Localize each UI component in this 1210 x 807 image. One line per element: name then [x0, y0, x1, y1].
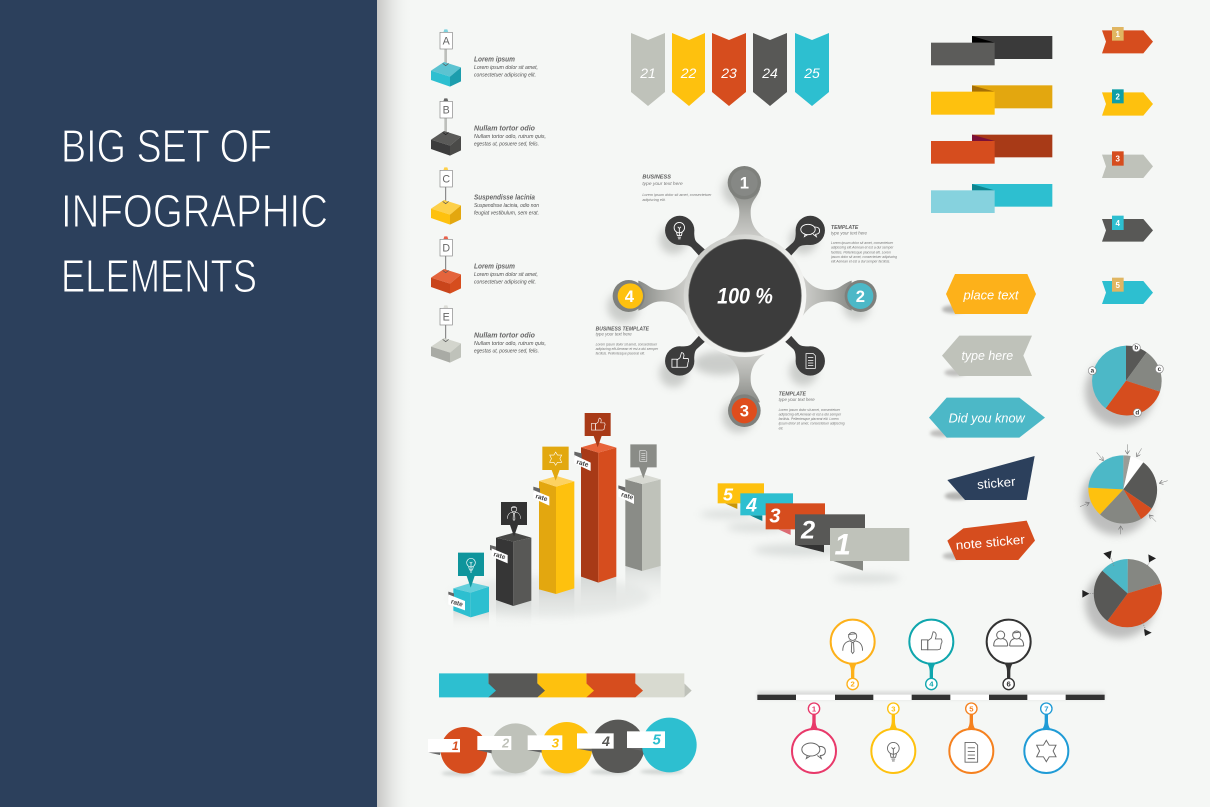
strip segment: gray — [635, 673, 692, 697]
step D: consectetuer adipiscing elit. — [474, 279, 536, 285]
icon: bulb — [674, 222, 685, 239]
bar: red: rate — [576, 459, 590, 469]
icon arm: chat — [772, 210, 831, 268]
bar shadows and reflections — [450, 566, 661, 630]
ribbon 3: 3 — [769, 505, 781, 527]
text: template right: elit.Aenean et est a dui semper facilisis. — [831, 260, 890, 264]
arrow tag 3: 3 — [1115, 155, 1120, 164]
text: business template: Lorem ipsum dolor sit amet, consectetuer — [596, 342, 658, 346]
pie chart 1: d — [1135, 410, 1139, 417]
circular diagram — [596, 166, 897, 433]
icon arm: document — [772, 323, 831, 382]
text: template right — [831, 225, 897, 264]
ribbon 5 — [718, 483, 764, 509]
pin 1 — [792, 703, 836, 773]
circle 4 — [577, 720, 645, 773]
panel: title — [0, 0, 377, 807]
step A: Lorem ipsum dolor sit amet, — [474, 65, 538, 71]
arrow tag 1 — [1102, 27, 1153, 53]
ribbon 4: 4 — [745, 496, 757, 517]
bar: yellow: rate — [535, 493, 549, 503]
step B: Nullam tortor odio — [474, 126, 536, 133]
title — [61, 120, 328, 302]
panel shadow — [377, 0, 413, 807]
text: template bottom: ipsum dolor sit amet, consectetuer adipiscing — [778, 422, 845, 426]
pin 6: 6 — [1007, 680, 1011, 689]
ribbon 1: 1 — [835, 529, 851, 562]
banner 25: 25 — [803, 65, 820, 81]
step C: Suspendisse lacinia — [474, 195, 535, 202]
step A — [431, 29, 538, 87]
bar: yellow — [533, 447, 574, 594]
ribbon shadows — [700, 510, 900, 583]
ribbon 3 — [766, 503, 825, 535]
sticker: type here — [942, 336, 1032, 376]
banner 23 — [712, 33, 746, 106]
bar: teal: rate — [450, 599, 464, 609]
circle 2 — [477, 723, 541, 773]
sticker: place text: place text — [962, 288, 1019, 302]
title: INFOGRAPHIC — [61, 185, 328, 237]
text: template bottom: type your text here — [779, 397, 815, 402]
bar: dark — [490, 502, 531, 606]
banner 25 — [795, 33, 829, 106]
circle 1: 1 — [452, 739, 459, 753]
pin 7: 7 — [1044, 704, 1048, 713]
arrow strip — [439, 673, 692, 697]
step E — [431, 305, 546, 363]
node 3: 3 — [740, 402, 749, 421]
text: template right: TEMPLATE — [831, 225, 859, 231]
step C: C — [442, 174, 450, 186]
folded ribbon: red — [931, 135, 1052, 164]
folded ribbons and arrow tags — [931, 27, 1153, 304]
numbered circles with tags — [428, 718, 697, 776]
3D bar chart — [448, 413, 661, 630]
centre hub: 100 % — [717, 284, 773, 309]
sticker: note sticker: note sticker — [955, 533, 1025, 553]
circle shadows — [442, 769, 683, 776]
strip segment: teal — [439, 673, 496, 697]
diagram shadows — [607, 174, 870, 433]
text: template right: adipiscing elit.Aenean et est a dui semper — [831, 246, 894, 250]
text: business template: BUSINESS TEMPLATE — [596, 326, 649, 332]
circle 3 — [528, 722, 592, 773]
circle 4: 4 — [601, 733, 610, 749]
banner 21 — [631, 33, 665, 106]
circle 5 — [627, 718, 697, 772]
pin 6 — [987, 620, 1031, 690]
text: template bottom: adipiscing elit.Aenean et est a dui semper — [779, 412, 842, 416]
pin 2: 2 — [851, 680, 855, 689]
bar: gray — [618, 444, 661, 571]
node 1: 1 — [740, 174, 749, 193]
folded ribbon: yellow — [931, 85, 1052, 115]
pin 3 — [871, 703, 915, 773]
step E: Nullam tortor odio, rutrum quis, — [474, 341, 546, 347]
title: ELEMENTS — [61, 250, 257, 302]
pie charts — [1080, 344, 1168, 638]
step B: B — [443, 105, 450, 117]
pie chart 3 — [1082, 551, 1162, 638]
arrow tag 4: 4 — [1115, 219, 1120, 228]
step A: consectetuer adipiscing elit. — [474, 72, 536, 78]
step B — [431, 98, 546, 156]
step D: Lorem ipsum — [474, 264, 515, 271]
pie chart 1: b — [1134, 345, 1138, 352]
arrow tag 1: 1 — [1115, 30, 1120, 39]
pin 3: 3 — [891, 704, 895, 713]
banner 21: 21 — [639, 65, 656, 81]
silver arm 4 — [638, 251, 703, 341]
text: business template: type your text here — [596, 332, 632, 337]
banner 24: 24 — [761, 65, 778, 81]
silver arm 3 — [700, 337, 790, 402]
node 2: 2 — [856, 287, 865, 306]
step E: E — [443, 312, 450, 324]
icon arm: bulb — [659, 210, 718, 268]
step B: Nullam tortor odio, rutrum quis, — [474, 134, 546, 140]
step D: D — [442, 243, 450, 255]
text: template bottom: elit. — [779, 426, 783, 430]
banner 24 — [753, 33, 787, 106]
text: template bottom: TEMPLATE — [779, 392, 806, 398]
pin 4 — [909, 620, 953, 690]
ribbon 4 — [740, 493, 793, 521]
arrow tag 3 — [1102, 151, 1153, 178]
pie chart 1 — [1085, 344, 1163, 427]
circle 1 — [428, 727, 487, 774]
ribbon 2 — [795, 514, 865, 552]
numbered bookmark banners — [631, 33, 829, 106]
silver arm 1 — [700, 189, 790, 254]
sticker labels — [929, 274, 1045, 560]
pin 2 — [831, 620, 875, 690]
bar: dark: rate — [493, 551, 507, 561]
text: template right: ipsum dolor sit amet, consectetuer adipiscing — [831, 255, 897, 259]
text: template right: facilisis. Pellentesque placerat elit. Lorem — [831, 250, 891, 254]
node 4 — [613, 280, 645, 312]
icon: thumbs up — [672, 353, 689, 367]
silver arm 2 — [787, 251, 852, 341]
text: template right: type your text here — [831, 230, 867, 235]
arrow tag 5 — [1102, 278, 1153, 304]
banner 22: 22 — [680, 65, 696, 81]
step D: Lorem ipsum dolor sit amet, — [474, 272, 538, 278]
step E: egestas ut, posuere sed, felis. — [474, 348, 539, 354]
sticker: sticker — [945, 456, 1035, 500]
bar: gray: rate — [620, 492, 634, 502]
text: business: BUSINESS — [642, 175, 671, 181]
circle 5: 5 — [653, 733, 662, 749]
pie chart 1: c — [1158, 366, 1162, 373]
title: BIG SET OF — [61, 120, 272, 172]
text: business: type your text here — [642, 181, 683, 186]
ribbon 2: 2 — [800, 517, 815, 545]
pin 7 — [1024, 703, 1068, 773]
folded ribbon: teal — [931, 184, 1052, 213]
sticker: type here: type here — [961, 349, 1013, 363]
step C: Suspendisse lacinia, odio non — [474, 203, 539, 209]
step C: feugiat vestibulum, sem erat. — [474, 210, 539, 216]
node 3 — [728, 394, 761, 427]
text: template bottom: Lorem ipsum dolor sit amet, consectetuer — [779, 408, 841, 412]
sticker: sticker: sticker — [977, 475, 1016, 492]
timeline with pins — [757, 620, 1105, 773]
text: business — [642, 175, 712, 202]
node 4: 4 — [625, 287, 635, 306]
strip segment: yellow — [537, 673, 594, 697]
text: template right: Lorem ipsum dolor sit amet, consectetuer — [831, 241, 894, 245]
bar: teal — [448, 553, 489, 617]
pin 4: 4 — [929, 680, 934, 689]
step C — [431, 167, 539, 225]
strip segment: dark — [488, 673, 545, 697]
stacked number ribbons — [700, 483, 909, 583]
sticker: place text — [942, 274, 1036, 314]
step A: Lorem ipsum — [474, 57, 515, 64]
bar: red — [574, 413, 616, 583]
banner 22 — [672, 33, 705, 106]
pin 5 — [949, 703, 993, 773]
text: business template: adipiscing elit.Aenean et est a dui semper — [596, 347, 659, 351]
folded ribbon: dark — [931, 36, 1052, 65]
circle 2: 2 — [501, 737, 509, 751]
pie chart 2 — [1080, 444, 1168, 535]
step E: Nullam tortor odio — [474, 333, 536, 340]
icon arm: thumb — [659, 323, 718, 382]
sticker: note sticker — [943, 521, 1035, 560]
icon: speech bubbles — [801, 224, 820, 237]
timeline bar — [757, 691, 1105, 700]
node 2 — [845, 280, 877, 312]
step D — [431, 236, 538, 294]
text: business template: facilisis. Pellentesque placerat elit. — [596, 352, 645, 356]
text: business: adipiscing elit. — [642, 198, 666, 202]
text: business template — [596, 326, 659, 356]
strip segment: red — [586, 673, 643, 697]
ribbon 5: 5 — [723, 485, 734, 505]
pie chart 1: a — [1091, 368, 1095, 375]
text: template bottom: facilisis. Pellentesque placerat elit. Lorem — [779, 417, 839, 421]
step B: egestas ut, posuere sed, felis. — [474, 141, 539, 147]
arrow tag 2: 2 — [1115, 92, 1120, 101]
node 1 — [728, 166, 761, 199]
pin 5: 5 — [969, 704, 974, 713]
arrow tag 2 — [1102, 89, 1153, 116]
text: business: Lorem ipsum dolor sit amet, consectetuer — [642, 193, 712, 197]
list: lettered cube steps — [431, 29, 546, 363]
icon: document — [806, 354, 815, 368]
sticker: did you know — [929, 398, 1045, 438]
text: template bottom — [778, 392, 845, 430]
ribbon 1 — [830, 528, 909, 571]
centre hub — [684, 234, 806, 357]
circle 3: 3 — [552, 735, 560, 750]
arrow tag 4 — [1102, 216, 1153, 242]
banner 23: 23 — [720, 65, 737, 81]
pin 1: 1 — [812, 704, 817, 713]
arrow tag 5: 5 — [1115, 281, 1120, 290]
step A: A — [443, 36, 451, 48]
sticker: did you know: Did you know — [949, 412, 1026, 426]
